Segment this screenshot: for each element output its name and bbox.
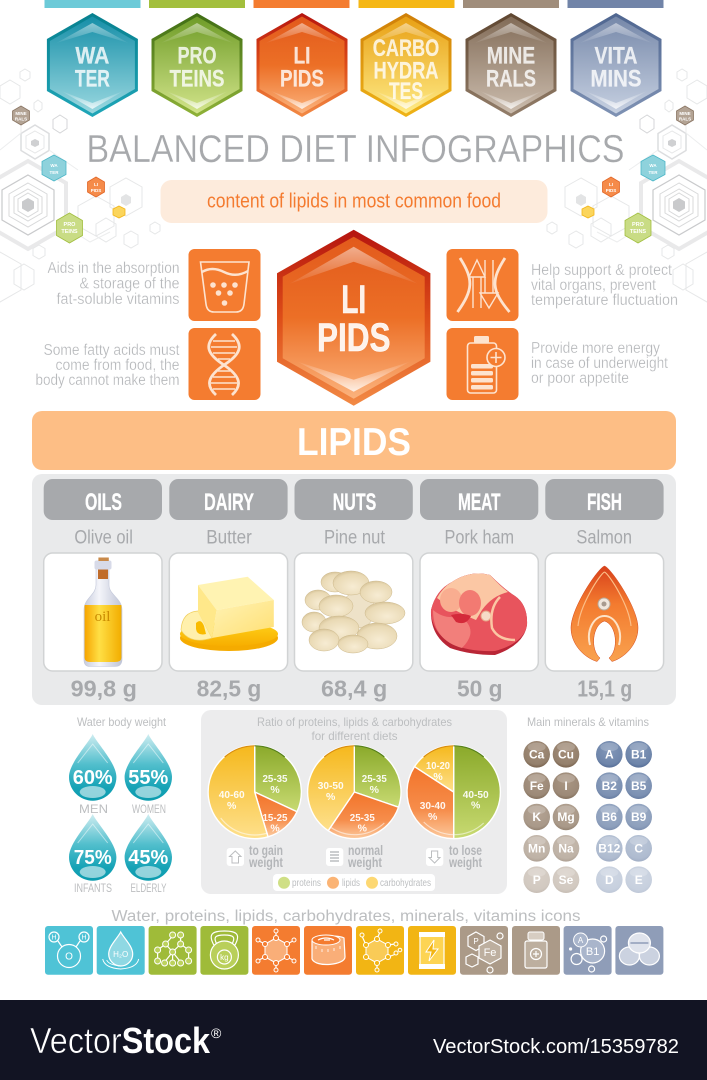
lipid values per food: 68,4 g [321, 676, 387, 702]
small decorative badges left: TER [50, 170, 59, 175]
lipid values per food: 50 g [457, 676, 503, 702]
icon: vitamin bubbles [564, 926, 612, 975]
diet labels with icons: weight [347, 854, 382, 870]
vitamin balls: B5 [631, 779, 647, 793]
pie chart: to gain weight: 15-25 [262, 812, 288, 824]
small decorative badges left [12, 106, 125, 243]
hexagon: vitamins [570, 13, 662, 117]
pie chart: normal weight: 30-50 [318, 780, 344, 792]
lipid values per food: 82,5 g [197, 676, 261, 702]
icon row heading: Water, proteins, lipids, carbohydrates, minerals, vitamins icons [112, 908, 581, 925]
hexagon: carbohydrates [360, 13, 452, 117]
vitamin balls [596, 741, 652, 893]
drop: men: 60% [73, 767, 113, 789]
large lipids hexagon: LI [341, 278, 366, 322]
mineral balls: Fe [530, 779, 544, 793]
lipid values per food: 99,8 g [71, 676, 137, 702]
drop: infants: 75% [74, 847, 112, 869]
benefit text left top: & storage of the [80, 276, 180, 292]
panel heading: for different diets [312, 729, 398, 743]
VectorStock logo: VectorStock [30, 1020, 211, 1061]
icon: battery with plus [446, 328, 518, 400]
icon: energy bar [408, 926, 456, 975]
drop: women: 55% [128, 767, 169, 789]
hexagon: carbohydrates: HYDRA [374, 58, 438, 84]
diet labels with icons: weight [448, 854, 482, 870]
icon: carbohydrate molecule [356, 926, 404, 975]
diet labels with icons: weight [248, 854, 283, 870]
benefit text right top: vital organs, prevent [531, 277, 657, 294]
icon: salmon steak [571, 566, 638, 662]
lipid values per food [71, 676, 632, 702]
vitamin balls: A [605, 748, 614, 762]
hexagon: water [47, 13, 138, 117]
pie chart: to lose weight: 10-20 [426, 760, 450, 772]
pie legend: proteins [292, 878, 321, 889]
icon: vitamin bubbles: B1 [586, 946, 599, 958]
pie chart: normal weight [308, 745, 401, 839]
pie chart: to gain weight: 40-60 [219, 789, 245, 801]
pie chart: to lose weight: 30-40 [420, 800, 446, 812]
pie chart: to gain weight: % [270, 784, 280, 796]
small decorative badges left: MINE [15, 111, 27, 116]
icon: water molecule: H [51, 934, 57, 942]
category tabs [44, 479, 664, 520]
hexagon: proteins: PRO [178, 42, 216, 70]
pie chart: to lose weight: 40-50 [463, 789, 489, 801]
small decorative badges left: WA [50, 163, 58, 168]
mineral balls: Mg [557, 810, 575, 824]
food cards [44, 553, 664, 671]
small decorative badges right: TEINS [630, 229, 646, 235]
icon: DNA helix [188, 328, 260, 400]
drop: elderly [125, 814, 172, 881]
icon: pills [615, 926, 663, 975]
food names: Pork ham [444, 528, 514, 548]
vitamin balls: C [634, 842, 643, 856]
icon: tape measure [304, 926, 352, 975]
panel heading [257, 715, 452, 743]
benefit text right top [531, 262, 678, 309]
drop: men [69, 734, 116, 801]
pie chart: to gain weight: % [270, 822, 280, 834]
small decorative badges right [582, 106, 694, 243]
icon: mineral hexagons: Fe [484, 947, 496, 959]
hexagon: proteins [152, 13, 242, 117]
hexagon: vitamins: MINS [590, 66, 642, 92]
drop captions: ELDERLY [130, 883, 167, 895]
small decorative badges right: MINE [679, 111, 691, 116]
drop captions: WOMEN [132, 804, 166, 816]
icon: vital organs with arrows [446, 249, 518, 321]
lipid values per food: 15,1 g [577, 676, 632, 702]
icon: lipid molecule [252, 926, 300, 975]
pie chart: normal weight: % [358, 822, 368, 834]
drop: infants [69, 814, 116, 881]
icon: water molecule [45, 926, 93, 975]
heading: Main minerals & vitamins [527, 715, 649, 729]
small decorative badges left: PIDS [91, 188, 101, 193]
vitamin balls: B6 [602, 810, 617, 824]
drop captions: MEN [79, 804, 108, 816]
hexagon: minerals: RALS [486, 66, 536, 92]
mineral balls: P [533, 873, 541, 887]
benefit text left bottom: body cannot make them [36, 372, 180, 389]
icon: butter on a dish [180, 577, 278, 651]
lipids banner: LIPIDS [297, 421, 411, 464]
icon: supplement bottle [512, 926, 560, 975]
small decorative badges left: PRO [64, 222, 76, 228]
food names: Olive oil [74, 528, 133, 548]
small decorative badges right: PIDS [606, 188, 616, 193]
small decorative badges right: TER [648, 170, 658, 175]
hexagon: minerals: MINE [487, 42, 535, 70]
icon: pine nuts [302, 571, 405, 653]
pie chart: normal weight: % [326, 791, 336, 803]
drop: women [125, 734, 172, 801]
pie chart: to lose weight: % [433, 771, 443, 783]
drop captions: INFANTS [74, 883, 112, 895]
hexagon: proteins: TEINS [170, 66, 224, 92]
mineral balls: K [532, 810, 541, 824]
panel: main minerals and vitamins [523, 715, 652, 893]
benefit text right bottom: in case of underweight [531, 355, 669, 372]
pie legend [273, 874, 435, 891]
icon: protein chain [149, 926, 197, 975]
benefit text right top: Help support & protect [531, 262, 673, 279]
icon row [45, 926, 663, 975]
food names: Salmon [576, 528, 632, 548]
drop: elderly: 45% [128, 847, 169, 869]
benefit text left top [48, 260, 180, 308]
pie chart: normal weight: 25-35 [350, 812, 375, 824]
pie chart: normal weight: % [370, 784, 380, 796]
image id: VectorStock.com/15359782 [433, 1036, 679, 1058]
small decorative badges left: LI [94, 182, 98, 187]
mineral balls: Ca [529, 748, 545, 762]
category tabs: FISH [587, 489, 622, 516]
icon: kettlebell [200, 926, 248, 975]
benefit text right bottom [531, 340, 669, 387]
colour tabs along the top [44, 0, 664, 8]
mineral balls: Cu [558, 748, 574, 762]
benefit text left top: Aids in the absorption [48, 260, 180, 277]
benefit text right top: temperature fluctuation [531, 292, 678, 309]
small decorative badges left: TEINS [61, 229, 78, 235]
hexagon: carbohydrates: CARBO [373, 35, 439, 62]
hexagon: carbohydrates: TES [389, 78, 423, 105]
panel: foods rich in lipids [32, 474, 676, 705]
heading: Water body weight [77, 715, 167, 729]
vitamin balls: B2 [602, 779, 617, 793]
pie chart: to gain weight: % [227, 800, 237, 812]
hexagon: lipids [256, 13, 348, 117]
hexagon: lipids: LI [294, 42, 310, 70]
benefit text right bottom: Provide more energy [531, 340, 660, 357]
footer band [0, 1000, 707, 1080]
diet labels with icons: normal [348, 842, 383, 858]
panel: water body weight [69, 715, 172, 895]
vitamin balls: E [635, 873, 643, 887]
icon: olive oil bottle: oil [95, 609, 110, 625]
icon: glass with fat droplets [188, 249, 260, 321]
left decorative hexagon pattern [0, 69, 160, 302]
vitamin balls: B1 [631, 748, 647, 762]
category tabs: DAIRY [204, 489, 254, 516]
small decorative badges left: RALS [15, 116, 27, 122]
small decorative badges right: PRO [632, 222, 645, 228]
icon: kettlebell: kg [220, 953, 229, 962]
icon: mineral hexagons: P [473, 937, 479, 946]
diet labels with icons: to lose [449, 842, 482, 858]
icon: olive oil bottle [84, 558, 122, 666]
icon: water drop with ripples: H₂O [113, 950, 128, 959]
pie chart: to lose weight [407, 745, 500, 839]
mineral balls [523, 741, 579, 893]
icon: water molecule: O [65, 952, 73, 962]
pie legend: carbohydrates [380, 878, 431, 889]
hexagon: vitamins: VITA [594, 42, 638, 70]
panel: ratio pie charts [201, 710, 507, 894]
large lipids hexagon: PIDS [317, 316, 390, 360]
large lipids hexagon [277, 230, 430, 406]
registered mark: ® [211, 1025, 222, 1041]
category tabs: MEAT [458, 489, 501, 516]
subtitle pill [160, 180, 548, 223]
benefit text left top: fat-soluble vitamins [56, 291, 180, 308]
category tabs: OILS [85, 489, 122, 516]
hexagon: water: WA [75, 42, 109, 70]
lipids banner [32, 411, 676, 470]
icon: vitamin bubbles: A [578, 936, 584, 945]
food names: Pine nut [324, 528, 386, 548]
pie chart: to gain weight: 25-35 [262, 773, 288, 785]
panel heading: Ratio of proteins, lipids & carbohydrates [257, 715, 452, 729]
icon: water drop with ripples [97, 926, 145, 975]
subtitle pill: content of lipids in most common food [207, 190, 501, 212]
small decorative badges right: LI [609, 182, 613, 187]
mineral balls: Na [558, 842, 574, 856]
mineral balls: I [564, 779, 568, 793]
diet labels with icons: to gain [249, 842, 283, 858]
pie chart: to lose weight: % [428, 811, 438, 823]
pie chart: to gain weight [208, 745, 301, 839]
small decorative badges right: WA [649, 163, 657, 168]
category tabs: NUTS [333, 489, 376, 516]
icon: mineral hexagons [460, 926, 508, 975]
benefit text left bottom: come from food, the [56, 357, 180, 374]
hexagon: lipids: PIDS [280, 66, 324, 92]
benefit text right bottom: or poor appetite [531, 370, 629, 387]
pie chart: to lose weight: % [471, 800, 481, 812]
mineral balls: Mn [528, 842, 545, 856]
icon: water molecule: H [81, 934, 87, 942]
hexagon: water: TER [75, 66, 110, 92]
mineral balls: Se [559, 873, 574, 887]
vitamin balls: B9 [631, 810, 647, 824]
icon: pork ham [431, 574, 527, 655]
food names [74, 528, 632, 548]
pie legend: lipids [342, 878, 360, 889]
small decorative badges right: RALS [679, 116, 691, 122]
benefit text left bottom [36, 342, 180, 389]
drop captions [74, 804, 167, 895]
food names: Butter [206, 528, 252, 548]
title: BALANCED DIET INFOGRAPHICS [86, 128, 624, 171]
vitamin balls: D [605, 873, 614, 887]
vitamin balls: B12 [598, 842, 621, 856]
diet labels with icons [227, 842, 482, 870]
pie chart: normal weight: 25-35 [362, 773, 387, 785]
benefit text left bottom: Some fatty acids must [44, 342, 180, 359]
right decorative hexagon pattern [547, 69, 707, 302]
hexagon: minerals [466, 13, 556, 117]
